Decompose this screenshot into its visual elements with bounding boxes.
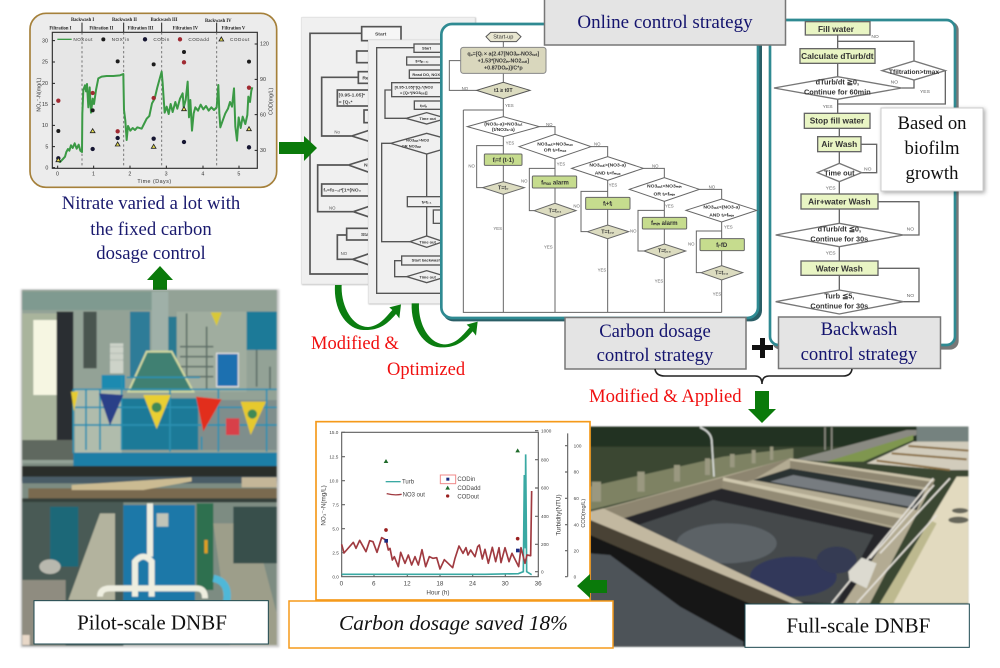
axis numbers and titles: 0.0 <box>332 574 339 579</box>
start and dosing formula: qₐ=[Qᵢ × a(2.47[NO3ᵢₙ-NO3ₛₑₜ] <box>467 51 540 57</box>
axis labels: 20 <box>42 81 48 87</box>
flow labels: NO <box>521 178 528 183</box>
axis labels: 120 <box>260 42 269 48</box>
flowchart sheet 2 <box>368 40 468 303</box>
axis labels: 90 <box>260 77 266 83</box>
axis labels: 60 <box>260 112 266 118</box>
photo: pilot-scale DNBF <box>21 289 279 647</box>
flowchart sheet 1: = [Q₁* <box>339 99 353 105</box>
panel: optimized control chart: 24 <box>469 581 477 588</box>
axis numbers and titles: 80 <box>574 470 579 475</box>
axis labels: 4 <box>201 172 204 178</box>
panel: optimized control chart: Turbidity(NTU) <box>555 494 562 536</box>
flow steps: Time out <box>824 168 855 177</box>
flowchart sheet 1: N <box>364 163 368 169</box>
nitrate line <box>58 72 252 162</box>
flowchart sheet 1: f₁=f₍ₜ₋₁₎*[1+(NO₃ <box>323 188 362 194</box>
axis labels: Time (Days) <box>137 179 172 185</box>
filtration and backwash phase labels: Filtration I <box>49 26 72 31</box>
filtration and backwash phase labels: Filtration II <box>89 26 113 31</box>
flow labels: NO <box>630 228 637 233</box>
flow steps: dTurb/dt ≦0, <box>818 225 861 234</box>
flow steps: Air Wash <box>821 139 857 149</box>
panel: backwash control flowchart: NO <box>907 226 914 232</box>
arrow: down to full-scale plant <box>748 391 776 423</box>
flow labels: YES <box>655 278 663 283</box>
decision diamonds and action boxes: T=t₀₃ <box>658 249 671 255</box>
axis numbers and titles: 0 <box>541 569 544 574</box>
COD markers <box>384 448 520 552</box>
flowchart sheet 1: Start <box>375 31 387 37</box>
caption: nitrate varied: dosage control <box>96 243 206 264</box>
chart legend <box>386 475 481 501</box>
chart legend <box>57 37 250 42</box>
label box: backwash control strategy: control strategy <box>801 344 918 365</box>
arrow: left from full-scale plant to chart <box>577 574 607 598</box>
flow labels: NO <box>468 164 475 169</box>
flowchart sheet 1: No <box>334 130 340 135</box>
brace joining strategies <box>655 369 852 384</box>
flow labels: NO <box>462 86 469 91</box>
flow labels: YES <box>493 226 502 231</box>
decision diamonds and action boxes <box>467 117 757 280</box>
axis numbers and titles: 10.0 <box>329 478 339 483</box>
flowchart sheet 2: [0.95-1.05]*[Q₁*(NO3 <box>395 85 434 90</box>
axis labels: 1 <box>92 172 95 178</box>
axis numbers and titles: 400 <box>541 514 549 519</box>
flow labels: YES <box>724 225 733 230</box>
panel: optimized control chart: 6 <box>372 581 376 588</box>
axis numbers and titles: 20 <box>574 548 579 553</box>
axis numbers and titles: 2.5 <box>332 550 339 555</box>
flow steps: Calculate dTurb/dt <box>801 51 874 61</box>
decision diamonds and action boxes: AND tᵢ<fₘₐₓ <box>595 171 621 177</box>
start and dosing formula: Start-up <box>493 35 513 41</box>
flowchart sheet 2: Start <box>422 46 432 51</box>
flow labels: NO <box>652 164 659 169</box>
heading box: online control strategy: Online control strategy <box>577 12 753 33</box>
panel: optimized control chart: 12 <box>404 581 411 588</box>
caption: nitrate varied: Nitrate varied a lot with <box>62 193 241 214</box>
flowchart sheet 2: Start backwash <box>412 258 441 263</box>
panel: optimized control chart: 36 <box>535 581 542 588</box>
callout: based on biofilm growth <box>881 108 983 191</box>
axis numbers and titles: 7.5 <box>332 502 339 507</box>
panel: optimized control chart: 0 <box>340 581 344 588</box>
flow labels: YES <box>557 161 565 166</box>
flowchart sheet 2: fᵢ=fₚ <box>420 103 428 108</box>
panel: backwash control flowchart: YES <box>826 251 836 257</box>
curved arrow 1 <box>335 285 401 330</box>
flow steps: Continue for 60min <box>804 88 871 97</box>
axis numbers and titles: 800 <box>541 457 549 462</box>
decision diamonds and action boxes: AND tᵢ>fₘᵢₙ <box>709 213 734 219</box>
flowchart sheet 2: Time out <box>419 274 437 279</box>
decision diamonds and action boxes: OR tᵢ>fₘₐₓ <box>544 148 566 154</box>
decision diamonds and action boxes: NO3ₒᵤₜ>NO3ₘₐₓ <box>537 141 573 147</box>
flow labels: YES <box>665 204 674 209</box>
chart legend: CODout <box>457 495 479 501</box>
panel: backwash control flowchart <box>770 20 959 350</box>
flowchart sheet 1 <box>302 17 475 284</box>
result box: carbon dosage saved 18% <box>289 601 613 648</box>
flowchart sheet 1: NO <box>329 205 336 210</box>
axis numbers and titles: 12.5 <box>329 454 339 459</box>
filtration and backwash phase labels: Backwash II <box>112 18 137 23</box>
data markers <box>56 37 251 162</box>
panel: backwash control flowchart: YES <box>920 89 931 95</box>
plot axes <box>342 431 568 577</box>
flow labels: NO <box>573 203 580 208</box>
flow steps: Water Wash <box>816 263 863 273</box>
label: full-scale DNBF: Full-scale DNBF <box>786 614 930 638</box>
panel: backwash control flowchart: YES <box>826 186 836 192</box>
flow labels: NO <box>594 142 601 147</box>
callout: based on biofilm growth: biofilm <box>904 138 960 159</box>
basin rim outline <box>590 458 935 603</box>
decision diamonds and action boxes: OR tᵢ<fₘᵢₙ <box>654 192 675 198</box>
callout: based on biofilm growth: Based on <box>897 113 967 134</box>
connector lines <box>449 42 722 312</box>
filtration and backwash phase labels: Filtration III <box>128 26 154 31</box>
start and dosing formula: t1 ≥ t0T <box>494 88 513 94</box>
panel: backwash control flowchart: NO <box>891 79 898 85</box>
start and dosing formula <box>461 32 546 99</box>
flow labels: YES <box>609 183 617 188</box>
chart legend: CODin <box>153 37 170 42</box>
filtration and backwash phase labels: Filtration IV <box>173 26 199 31</box>
flowchart sheet 2: Read DO, NOX <box>412 72 440 77</box>
flow labels: YES <box>713 292 721 297</box>
chart legend: CODadd <box>457 486 481 492</box>
axis labels: NO₃⁻-N(mg/L) <box>37 77 43 112</box>
flow labels <box>462 86 733 297</box>
flowchart sheet 1: NO <box>341 251 348 256</box>
panel: optimized control chart: 30 <box>502 581 509 588</box>
decision diamonds and action boxes: T=t₀ <box>498 185 509 191</box>
arrow: right from chart to flowcharts <box>279 136 317 161</box>
result box: carbon dosage saved 18%: Carbon dosage saved 18% <box>339 611 568 635</box>
flow labels: NO <box>709 185 716 190</box>
flow steps: Air+water Wash <box>808 196 871 206</box>
axis labels: 25 <box>42 60 48 66</box>
callout: based on biofilm growth: growth <box>906 163 959 184</box>
caption: nitrate varied <box>62 193 241 264</box>
flowchart sheet 2: Time out <box>419 239 437 244</box>
flow steps: Tfiltration>tmax <box>889 69 939 76</box>
flowchart sheet 2: OR NO3ₒᵤₜ <box>402 143 422 148</box>
panel: fixed carbon dosage nitrate chart <box>30 13 277 187</box>
panel: backwash control flowchart: YES <box>823 104 833 110</box>
panel: optimized control chart: 18 <box>436 581 444 588</box>
decision diamonds and action boxes: T=t₀₁ <box>549 208 562 214</box>
axis numbers and titles: 0 <box>574 574 577 579</box>
caption: modified and optimized: Modified & <box>311 334 399 354</box>
panel: backwash control flowchart: NO <box>864 167 872 173</box>
decision diamonds and action boxes: T=t₀₂ <box>601 229 615 235</box>
decision diamonds and action boxes: NO3ₒᵤₜ>(NO3-a) <box>589 163 626 169</box>
axis numbers and titles: 1000 <box>541 428 552 433</box>
decision diamonds and action boxes: NO3ₒᵤₜ<NO3ₘᵢₙ <box>647 184 682 190</box>
decision diamonds and action boxes: T=t₀₄ <box>715 270 729 276</box>
axis labels: 5 <box>45 144 48 150</box>
axis labels <box>37 38 275 185</box>
axis labels: 30 <box>260 148 266 154</box>
filtration and backwash phase labels: Backwash IV <box>205 19 232 24</box>
start and dosing formula: +0.87DOᵢₙ)]/C*ρ <box>484 66 523 72</box>
caption: nitrate varied: the fixed carbon <box>90 219 212 240</box>
axis labels: 15 <box>42 102 48 108</box>
panel: backwash control flowchart: NO <box>907 293 914 299</box>
axis numbers and titles: 40 <box>574 522 579 527</box>
chart legend: Turb <box>402 480 415 486</box>
decision diamonds and action boxes: fᵢ+fⱼ <box>603 200 612 207</box>
axis numbers and titles: 200 <box>541 542 549 547</box>
flow labels: NO <box>688 241 695 246</box>
panel: optimized control chart: Hour (h) <box>426 590 450 597</box>
turbidity line <box>342 454 532 575</box>
start and dosing formula: +1.53*[NO2ᵢₙ-NO2ₒᵤₜ] <box>478 58 529 64</box>
decision diamonds and action boxes: fᵢ=f (t-1) <box>493 158 514 164</box>
flowchart sheet 1: [0.95-1.05]* <box>339 93 365 99</box>
flow steps: Turb ≦5, <box>824 291 854 300</box>
label: pilot-scale DNBF <box>34 601 268 644</box>
heading box: online control strategy <box>544 0 786 45</box>
flow steps: Continue for 30s <box>810 235 868 244</box>
flow steps <box>774 22 945 314</box>
flowchart sheet 1: Read <box>362 75 375 81</box>
filtration and backwash phase labels: Filtration V <box>222 26 246 31</box>
axis numbers and titles: 5.0 <box>332 526 339 531</box>
axis labels: 30 <box>42 38 48 44</box>
decision diamonds and action boxes: (NO3ₛ-a)>NO3ₛₑₜ <box>484 121 523 127</box>
panel: optimized control chart <box>316 422 590 600</box>
panel: backwash control flowchart: NO <box>871 34 879 40</box>
chart legend: CODadd <box>188 37 209 42</box>
arrow: up from pilot photo to chart <box>147 266 173 290</box>
axis numbers and titles: 100 <box>574 443 582 448</box>
plus sign <box>752 338 773 358</box>
flowchart sheet 2: NO3ₒᵤₜ>NO3 <box>406 138 430 143</box>
label box: carbon dosage control strategy: control strategy <box>597 345 714 366</box>
panel: carbon dosage control flowchart <box>441 24 762 321</box>
flow steps: dTurb/dt ≧0, <box>816 78 859 87</box>
panel: optimized control chart: NO₃⁻-N(mg/L) <box>321 485 328 526</box>
axis numbers and titles: 600 <box>541 486 549 491</box>
flow steps: Continue for 30s <box>810 301 868 310</box>
flow steps: Stop fill water <box>810 116 865 126</box>
filtration and backwash phase labels: Backwash III <box>151 18 178 23</box>
curved arrows: modified and optimized <box>335 285 478 347</box>
chart legend: NOXout <box>73 37 93 42</box>
flowchart sheet 2: Time out <box>419 116 437 121</box>
axis labels: 3 <box>165 172 168 178</box>
axis numbers and titles: 15.0 <box>329 430 339 435</box>
flow labels: YES <box>544 244 553 249</box>
label: pilot-scale DNBF: Pilot-scale DNBF <box>77 610 227 634</box>
chart legend: CODout <box>230 37 250 42</box>
flow steps: Fill water <box>818 24 855 34</box>
axis numbers and titles <box>329 428 582 579</box>
chart: nitrate and COD over time <box>37 18 275 185</box>
decision diamonds and action boxes: fᵢ-fD <box>716 243 728 249</box>
caption: modified and applied: Modified & Applied <box>589 386 742 407</box>
decision diamonds and action boxes: NO3ₒᵤₜ<(NO3-a) <box>703 204 740 210</box>
decision diamonds and action boxes: fₘᵢₙ alarm <box>651 221 678 227</box>
filtration and backwash phase labels: Backwash I <box>71 18 94 23</box>
flow labels: YES <box>505 103 514 108</box>
flow labels: YES <box>598 267 606 272</box>
label: full-scale DNBF <box>745 604 969 647</box>
photo: full-scale DNBF <box>590 427 969 647</box>
axis labels: 2 <box>128 172 131 178</box>
axis labels: 0 <box>45 165 48 171</box>
filtration and backwash phase labels <box>49 18 246 31</box>
axis labels: COD(mg/L) <box>269 88 275 115</box>
label box: backwash control strategy <box>778 317 940 368</box>
axis labels: 10 <box>42 123 48 129</box>
flow labels: NO <box>546 122 553 127</box>
flowchart sheet 2: fᵢ=fᵢ₋₁ <box>422 199 432 204</box>
label box: backwash control strategy: Backwash <box>821 319 898 340</box>
axis labels: 0 <box>56 172 59 178</box>
flowchart sheet 2: = [Q₁*(NO3ₒᵤₜ)] <box>400 90 428 95</box>
flow labels: YES <box>506 141 514 146</box>
chart legend: NOX in <box>112 37 130 42</box>
decision diamonds and action boxes: (t/NO3ₛ-a) <box>492 127 515 133</box>
axis labels: 5 <box>237 172 240 178</box>
flowchart sheet 2: fᵢ=fᵢ₍ₜ₋₁₎ <box>415 59 428 64</box>
panel: optimized control chart: COD(mg/L) <box>581 499 587 528</box>
curved arrow 2 <box>412 303 478 347</box>
flowchart sheet 1: Sta <box>361 232 369 238</box>
label box: carbon dosage control strategy: Carbon dosage <box>599 321 711 342</box>
caption: modified and optimized: Optimized <box>387 360 466 380</box>
caption: modified and optimized <box>311 334 466 380</box>
axis numbers and titles: 60 <box>574 496 579 501</box>
chart legend: CODin <box>457 477 475 483</box>
NO3 out line <box>342 491 532 569</box>
label box: carbon dosage control strategy <box>565 318 746 369</box>
chart legend: NO3 out <box>403 492 425 498</box>
decision diamonds and action boxes: fₘₐₓ alarm <box>541 180 569 186</box>
